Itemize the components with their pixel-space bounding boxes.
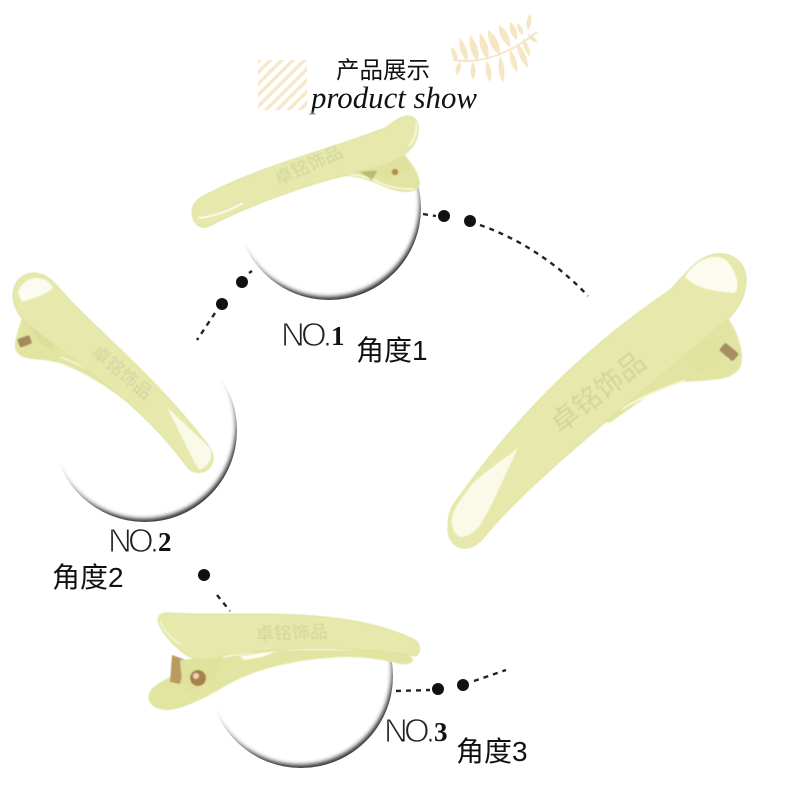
decorative striped square	[258, 60, 307, 110]
rivet	[17, 335, 32, 348]
hair clip 3	[148, 613, 420, 710]
dotted arc: left	[197, 271, 252, 340]
heading: Chinese title: 产品展示	[336, 57, 430, 83]
rivet	[190, 670, 206, 686]
upper blade	[448, 254, 746, 548]
upper blade	[192, 116, 418, 227]
label: NO.1: NO.	[281, 316, 332, 353]
label: NO.1: 1	[331, 321, 344, 351]
metal spring	[170, 655, 186, 684]
label: NO.2: NO.	[108, 522, 159, 559]
highlight	[685, 257, 737, 293]
lower jaw	[600, 315, 742, 423]
window slot	[240, 651, 277, 660]
circle ring 2	[51, 335, 237, 522]
label: NO.3: NO.	[384, 712, 435, 749]
circle ring 1	[235, 113, 421, 300]
hair clip 2	[13, 273, 213, 472]
heading: English title: product show	[309, 80, 477, 115]
dotted arc: top right	[423, 210, 588, 296]
upper blade	[13, 273, 213, 472]
dotted arc: lower right	[396, 670, 506, 695]
watermark: 卓铭饰品	[88, 342, 156, 403]
watermark: 卓铭饰品	[255, 622, 328, 644]
label: angle 1: 角度1	[356, 335, 428, 366]
highlight	[18, 278, 53, 302]
lower jaw	[148, 650, 413, 710]
icon: palm leaf	[451, 14, 537, 83]
circle ring 3	[207, 581, 393, 768]
upper blade	[158, 613, 420, 660]
lower jaw	[275, 155, 420, 198]
watermark: 卓铭饰品	[544, 346, 652, 439]
watermark: 卓铭饰品	[272, 142, 346, 189]
hair clip 1	[192, 116, 420, 227]
hair clip large	[448, 254, 746, 548]
hinge	[180, 656, 223, 692]
label: NO.3: 3	[434, 717, 448, 747]
label: NO.2: 2	[158, 527, 172, 557]
label: angle 2: 角度2	[52, 562, 124, 593]
label: angle 3: 角度3	[456, 736, 528, 767]
dotted arc: lower left	[198, 569, 230, 611]
lower jaw	[15, 318, 140, 403]
rivet	[719, 342, 739, 362]
